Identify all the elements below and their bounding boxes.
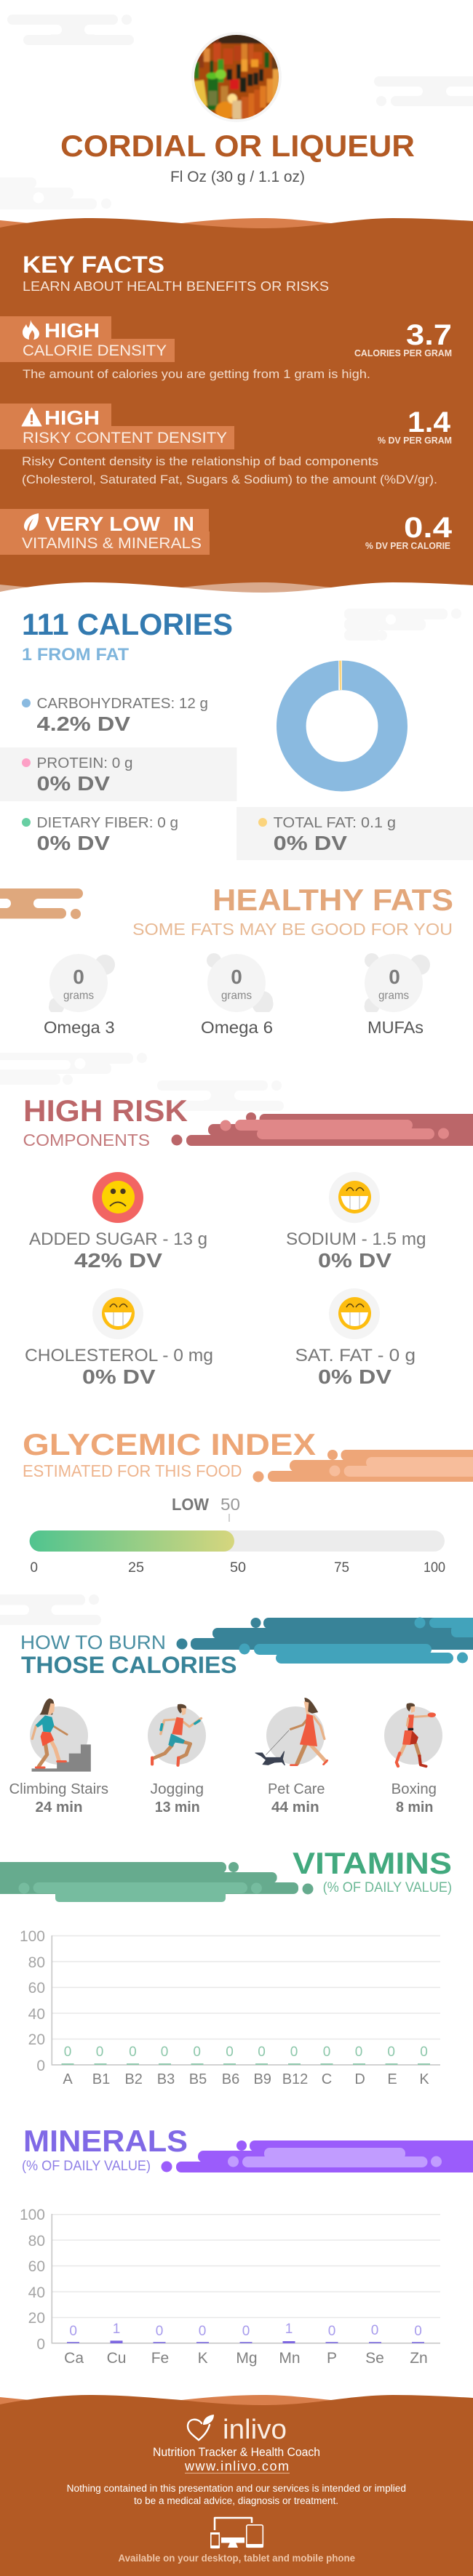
logo wordmark: inlivo (223, 2415, 287, 2445)
macro: total fat (236, 807, 473, 860)
decorative cloud: left of high risk (0, 1053, 147, 1085)
gauge scale labels: 50 (230, 1560, 246, 1576)
bar chart: minerals: Se (365, 2350, 384, 2367)
bar chart: minerals: 80 (28, 2233, 45, 2250)
food photo: bottles of liqueur (189, 32, 284, 124)
activity: boxing: Boxing (391, 1781, 437, 1797)
fat: omega 3 (44, 954, 115, 1037)
bar chart: minerals: Mg (236, 2350, 258, 2367)
fact: vitamins and minerals: 0.4 (404, 512, 453, 544)
fact: risky content density: 1.4 (408, 406, 451, 438)
macro: carbohydrates: CARBOHYDRATES: 12 g (36, 696, 208, 712)
panel: how to burn calories (9, 1617, 473, 1815)
icon: grin face (338, 1181, 371, 1213)
bar chart: vitamins: 0 (387, 2045, 395, 2060)
decorative cloud: below glycemic index (0, 1594, 116, 1625)
fat: mufas: MUFAs (367, 1018, 424, 1037)
fat: omega 3: grams (63, 990, 94, 1002)
bar chart: minerals: 0 (199, 2324, 206, 2339)
fact: calorie density: CALORIES PER GRAM (354, 348, 452, 358)
fact: calorie density: CALORIE DENSITY (23, 342, 167, 359)
bar chart: vitamins: D (354, 2071, 365, 2087)
bar chart: vitamins: 40 (28, 2006, 45, 2023)
activity: boxing (384, 1703, 442, 1815)
bar chart: vitamins: 0 (36, 2058, 45, 2074)
fact: calorie density: 3.7 (406, 319, 452, 351)
bar chart: vitamins: 0 (355, 2045, 362, 2060)
bar chart: vitamins: 20 (28, 2031, 45, 2048)
icon: grin face (338, 1297, 371, 1330)
macro: total fat: 0% DV (274, 832, 347, 854)
bar chart: vitamins: 100 (20, 1928, 45, 1945)
subheading: percent of daily value: (% OF DAILY VALUE) (323, 1880, 452, 1895)
decorative cloud: header left (0, 15, 157, 45)
panel: footer (0, 2395, 473, 2576)
bar chart: vitamins: 0 (96, 2045, 103, 2060)
bar chart: vitamins: B1 (92, 2071, 110, 2087)
panel: high risk components (23, 1094, 473, 1388)
risk: sodium: 0% DV (318, 1249, 391, 1272)
risk: added sugar: 42% DV (74, 1249, 162, 1272)
decorative bars: burn (176, 1617, 473, 1664)
panel: healthy fats (44, 883, 453, 1037)
fat: mufas: 0 (389, 966, 400, 988)
activity: climbing stairs: 24 min (35, 1799, 83, 1815)
fat: omega 6: Omega 6 (201, 1018, 273, 1037)
decorative cloud: above high risk (153, 1080, 293, 1111)
bar chart: minerals: Ca (64, 2350, 84, 2367)
icon: flame (23, 320, 39, 340)
icon: man jogging (152, 1704, 201, 1765)
subheading: key facts: LEARN ABOUT HEALTH BENEFITS OR RISKS (23, 279, 329, 294)
bar chart: minerals: Fe (151, 2350, 169, 2367)
fat: omega 3: 0 (73, 966, 84, 988)
icon: devices (210, 2518, 263, 2548)
panel: key facts (0, 218, 473, 601)
icon: warning (22, 408, 41, 426)
bar chart: vitamins (20, 1928, 440, 2087)
macro: total fat: TOTAL FAT: 0.1 g (274, 815, 396, 831)
bar chart: minerals: P (327, 2350, 337, 2367)
decorative cloud: header right (364, 76, 473, 106)
fact: vitamins and minerals (0, 509, 453, 555)
activity: pet care: Pet Care (268, 1781, 325, 1797)
disclaimer: to be a medical advice, diagnosis or treatment. (134, 2495, 338, 2506)
bar chart: vitamins: 0 (258, 2045, 266, 2060)
activity: climbing stairs (9, 1698, 108, 1815)
risk: added sugar: ADDED SUGAR - 13 g (29, 1229, 207, 1249)
bar chart: minerals: Cu (107, 2350, 126, 2367)
bar chart: minerals: 60 (28, 2258, 45, 2275)
decorative cloud: calories (344, 609, 461, 641)
activity: boxing: 8 min (396, 1799, 433, 1815)
bar chart: vitamins: 60 (28, 1980, 45, 1997)
bar chart: minerals: 1 (113, 2322, 120, 2337)
wave: top of key facts (0, 218, 473, 234)
panel: calories (0, 607, 473, 860)
bar chart: minerals (20, 2207, 440, 2367)
bar chart: vitamins: B3 (157, 2071, 175, 2087)
website link: www.inlivo.com (184, 2459, 289, 2473)
macro: dietary fiber (22, 815, 178, 854)
bar chart: minerals: 0 (414, 2324, 422, 2339)
bar chart: minerals: 0 (371, 2323, 378, 2338)
gauge scale labels: 0 (31, 1560, 38, 1576)
fat: mufas (365, 953, 430, 1037)
subheading: percent of daily value: (% OF DAILY VALUE) (22, 2159, 151, 2174)
risk: saturated fat: SAT. FAT - 0 g (295, 1346, 416, 1365)
icon: boxer (397, 1703, 436, 1766)
glycemic value: LOW (172, 1495, 209, 1514)
fact: vitamins and minerals: % DV PER CALORIE (365, 540, 450, 551)
gauge scale labels: 100 (424, 1560, 445, 1576)
bar chart: vitamins: C (322, 2071, 332, 2087)
fact: calorie density: The amount of calories you are getting from 1 gram is high. (23, 368, 370, 381)
icon: woman climbing stairs (32, 1698, 91, 1772)
activity: jogging: 13 min (155, 1799, 200, 1815)
decorative bars: high risk (172, 1112, 473, 1146)
activity: climbing stairs: Climbing Stairs (9, 1781, 108, 1797)
fact: risky content density: % DV PER GRAM (378, 435, 452, 446)
bar chart: minerals: 0 (328, 2324, 335, 2339)
bar chart: vitamins: E (387, 2071, 397, 2087)
fat: omega 6 (201, 953, 274, 1037)
macro: dietary fiber: 0% DV (36, 832, 110, 854)
bar chart: vitamins: 0 (161, 2045, 168, 2060)
risk: sodium (286, 1172, 426, 1272)
glycemic gauge bar (30, 1530, 445, 1552)
icon: woman walking dog (255, 1698, 327, 1765)
glycemic value: 50 (220, 1495, 240, 1514)
macro: carbohydrates (22, 696, 208, 735)
fact: risky content density: Risky Content density is the relationship of bad components (22, 455, 378, 468)
activity: jogging: Jogging (150, 1781, 204, 1797)
bar chart: minerals: Zn (410, 2350, 428, 2367)
bar chart: vitamins: 0 (193, 2045, 201, 2060)
heading: vitamins: VITAMINS (293, 1846, 452, 1880)
risk: added sugar (29, 1172, 207, 1272)
fat: omega 3: Omega 3 (44, 1018, 115, 1037)
panel: vitamins (0, 1846, 452, 2087)
gauge scale labels: 75 (334, 1560, 349, 1576)
bar chart: minerals: 20 (28, 2310, 45, 2327)
subheading: healthy fats: SOME FATS MAY BE GOOD FOR YOU (132, 920, 453, 939)
fact: calorie density (0, 316, 452, 381)
activity: jogging (148, 1704, 206, 1815)
risk: saturated fat (295, 1288, 416, 1388)
serving size: Fl Oz (30 g / 1.1 oz) (170, 169, 305, 185)
decorative cloud: header lower left (0, 177, 111, 209)
disclaimer: Nothing contained in this presentation and our services is intended or implied (67, 2483, 406, 2494)
bar chart: vitamins: 0 (129, 2045, 137, 2060)
bar chart: vitamins: B9 (253, 2071, 271, 2087)
fact: risky content density: HIGH (44, 406, 100, 429)
heading: high risk: HIGH RISK (23, 1094, 188, 1128)
panel: minerals (20, 2124, 473, 2367)
activity: pet care (255, 1698, 327, 1815)
heading: how to burn: HOW TO BURN (20, 1632, 166, 1653)
fat: mufas: grams (378, 990, 409, 1002)
bar chart: vitamins: B12 (282, 2071, 308, 2087)
heading: those calories: THOSE CALORIES (21, 1652, 237, 1678)
risk: saturated fat: 0% DV (318, 1365, 391, 1388)
risk: sodium: SODIUM - 1.5 mg (286, 1229, 426, 1249)
decorative bars: minerals (162, 2140, 473, 2172)
panel: glycemic index (23, 1427, 473, 1576)
subheading: components: COMPONENTS (23, 1131, 150, 1149)
subheading: glycemic index: ESTIMATED FOR THIS FOOD (23, 1461, 242, 1480)
bar chart: minerals: 0 (36, 2336, 45, 2353)
fat: omega 6: grams (221, 990, 252, 1002)
heading: calories: 111 CALORIES (22, 607, 233, 641)
bar chart: vitamins: B6 (222, 2071, 239, 2087)
risk: cholesterol: CHOLESTEROL - 0 mg (25, 1346, 213, 1365)
wave: footer (0, 2395, 473, 2411)
activity: pet care: 44 min (271, 1799, 319, 1815)
bar chart: minerals: 0 (69, 2324, 77, 2339)
fact: risky content density: RISKY CONTENT DENSITY (23, 430, 227, 446)
availability note: Available on your desktop, tablet and mobile phone (118, 2552, 355, 2564)
fact: vitamins and minerals: VERY LOW (45, 513, 161, 535)
bar chart: minerals: 1 (285, 2322, 293, 2337)
icon: sad face (102, 1181, 135, 1213)
fat: omega 6: 0 (231, 966, 242, 988)
donut chart: calorie sources (291, 661, 393, 777)
icon: leaf (24, 513, 39, 531)
heading: minerals: MINERALS (23, 2124, 188, 2158)
gauge scale labels (31, 1560, 445, 1576)
bar chart: minerals: 0 (156, 2324, 163, 2339)
bar chart: vitamins: 0 (323, 2045, 330, 2060)
fact: vitamins and minerals: IN (173, 513, 194, 535)
title: CORDIAL OR LIQUEUR (60, 129, 415, 163)
bar chart: minerals: 0 (242, 2324, 250, 2339)
bar chart: vitamins: K (419, 2071, 429, 2087)
tagline: Nutrition Tracker & Health Coach (153, 2445, 320, 2459)
bar chart: minerals: 100 (20, 2207, 45, 2223)
logo: heart and leaf (188, 2415, 214, 2440)
bar chart: vitamins: 0 (290, 2045, 298, 2060)
bar chart: vitamins: 0 (420, 2045, 428, 2060)
subheading: from fat: 1 FROM FAT (22, 645, 129, 665)
bar chart: minerals: 40 (28, 2284, 45, 2301)
bar chart: vitamins: 0 (64, 2045, 71, 2060)
wave: bottom of key facts (0, 582, 473, 601)
macro: protein: 0% DV (36, 772, 110, 795)
decorative bars: vitamins (0, 1862, 313, 1902)
decorative bars: healthy fats (0, 888, 99, 919)
heading: key facts: KEY FACTS (23, 252, 164, 278)
heading: healthy fats: HEALTHY FATS (212, 883, 453, 917)
bar chart: vitamins: A (63, 2071, 73, 2087)
bar chart: vitamins: 0 (226, 2045, 234, 2060)
icon: grin face (102, 1297, 135, 1330)
macro: carbohydrates: 4.2% DV (36, 713, 130, 735)
bar chart: vitamins: B5 (189, 2071, 207, 2087)
fact: risky content density (0, 404, 452, 486)
bar chart: minerals: Mn (279, 2350, 301, 2367)
risk: cholesterol (25, 1288, 213, 1388)
gauge scale labels: 25 (128, 1560, 144, 1576)
disclaimer (67, 2483, 406, 2506)
fact: vitamins and minerals: VITAMINS & MINERALS (22, 535, 202, 552)
bar chart: vitamins: B2 (124, 2071, 143, 2087)
fact: calorie density: HIGH (44, 319, 100, 342)
bar chart: minerals: K (198, 2350, 208, 2367)
risk: cholesterol: 0% DV (82, 1365, 156, 1388)
heading: glycemic index: GLYCEMIC INDEX (23, 1427, 316, 1461)
macro: protein (0, 747, 237, 801)
macro: protein: PROTEIN: 0 g (36, 755, 132, 771)
decorative bars: glycemic index (253, 1450, 473, 1482)
fact: risky content density: (Cholesterol, Saturated Fat, Sugars & Sodium) to the amount (%DV/gr). (22, 473, 437, 486)
glycemic value (172, 1495, 240, 1522)
bar chart: vitamins: 80 (28, 1954, 45, 1971)
macro: dietary fiber: DIETARY FIBER: 0 g (36, 815, 178, 831)
